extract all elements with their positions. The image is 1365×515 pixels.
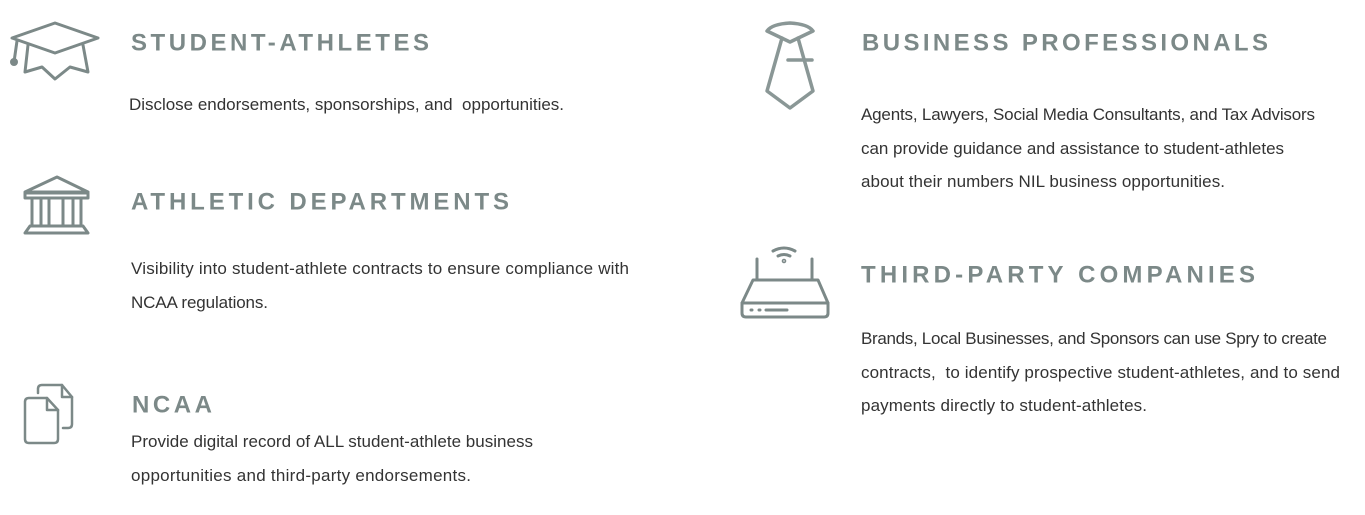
panel: student-athletes [12, 23, 564, 114]
icon: graduation cap [12, 23, 98, 79]
panel: business professionals [767, 23, 1315, 191]
heading: NCAA: NCAA [132, 392, 212, 418]
panel: athletic departments [25, 177, 629, 312]
text: third-party companies description: payments directly to student-athletes. [861, 396, 1147, 415]
text: third-party companies description [861, 329, 1340, 415]
heading: student-athletes: STUDENT-ATHLETES [131, 30, 429, 56]
icon: necktie [767, 23, 813, 108]
text: athletic departments description: NCAA regulations. [131, 293, 268, 312]
text: third-party companies description: contracts, to identify prospective student-athletes, and to send [861, 363, 1340, 382]
text: business professionals description: about their numbers NIL business opportunities. [861, 172, 1225, 191]
heading: third-party companies: THIRD-PARTY COMPANIES [861, 262, 1255, 288]
text: athletic departments description [131, 259, 629, 312]
text: NCAA description: opportunities and third-party endorsements. [131, 466, 471, 485]
heading: business professionals: BUSINESS PROFESSIONALS [862, 30, 1268, 56]
text: business professionals description [861, 105, 1315, 191]
text: third-party companies description: Brands, Local Businesses, and Sponsors can use Spry to create [861, 329, 1327, 348]
text: athletic departments description: Visibility into student-athlete contracts to ensure compliance with [131, 259, 629, 278]
text: NCAA description: Provide digital record of ALL student-athlete business [131, 432, 533, 451]
icon: documents [25, 385, 72, 443]
heading: athletic departments: ATHLETIC DEPARTMENTS [131, 188, 509, 216]
text: NCAA description [131, 432, 533, 485]
text: business professionals description: Agents, Lawyers, Social Media Consultants, and Tax Advisors [861, 105, 1315, 124]
text: business professionals description: can provide guidance and assistance to student-athletes [861, 139, 1284, 158]
panel: third-party companies [742, 248, 1340, 415]
icon: wifi router [742, 248, 828, 317]
icon: institution building [25, 177, 88, 233]
text: student-athletes description: Disclose endorsements, sponsorships, and opportunities. [129, 95, 564, 114]
panel: NCAA [25, 385, 533, 485]
